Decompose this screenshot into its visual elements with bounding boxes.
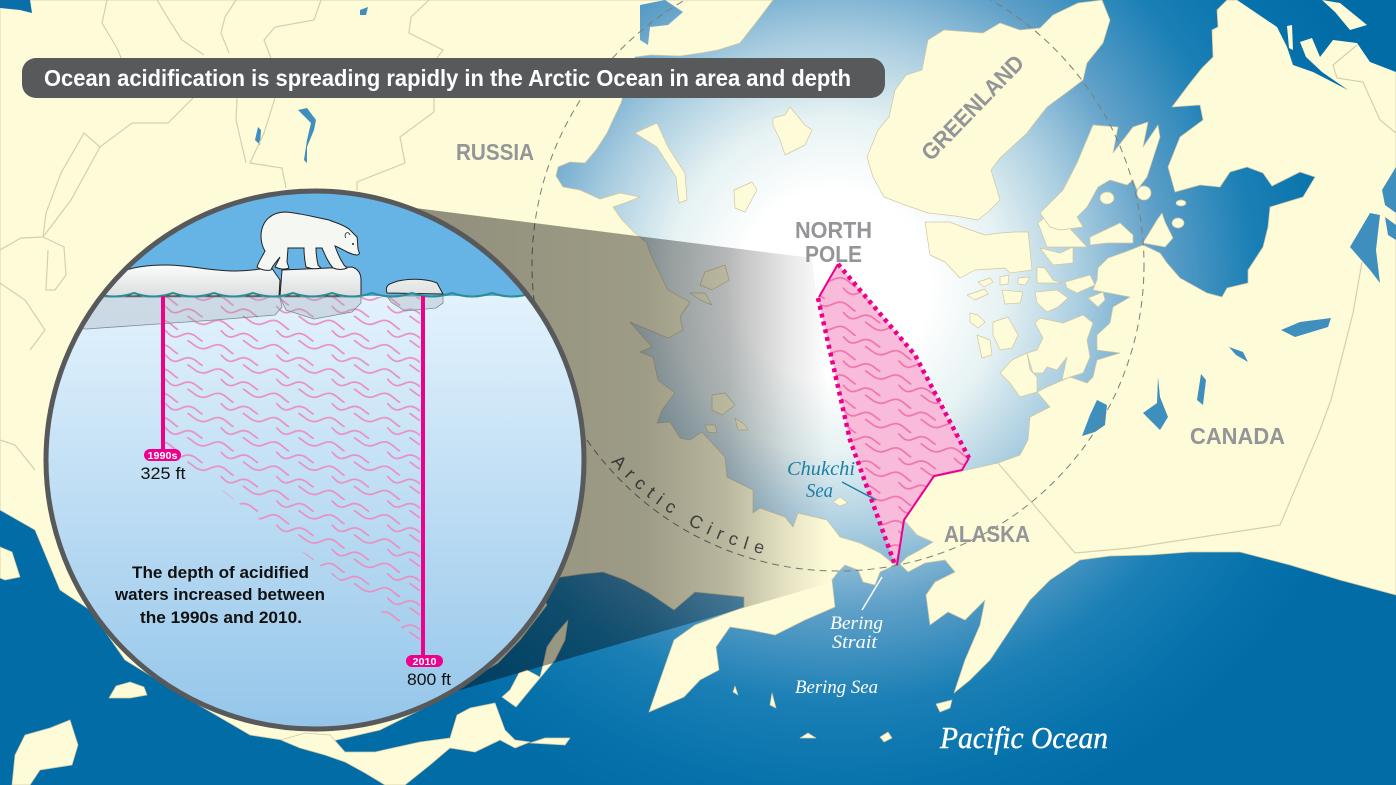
land: Arctic islands [635,107,848,506]
water: Russian north gulf [640,0,683,45]
acidified area on map [818,264,969,565]
Arctic Circle label: Arctic Circle [611,457,764,554]
acidified water wave pattern [165,297,420,642]
depth caption: waters increased between [114,585,325,604]
water surface line [94,293,532,296]
depth label 800 ft: 800 ft [407,670,451,689]
area solid edges [819,264,969,565]
land: Korea and islands [0,547,147,785]
ice floes below water [76,296,443,329]
shadow cone from map to magnifier [415,208,850,693]
land: Canadian archipelago small islands [967,275,1030,358]
depth line 1990s [161,296,165,451]
land: Greenland [867,0,1110,220]
land: Victoria island [1027,315,1093,380]
label: Bering Strait with leader: Bering [830,613,883,634]
label: Canada: CANADA [1190,423,1285,449]
sky [130,194,524,296]
label: Chukchi Sea with leader [787,458,876,502]
area dotted edges [818,264,969,565]
title banner: Ocean acidification is spreading rapidly in the Arctic Ocean in area and depth [44,65,851,91]
land: Baffin Island [1040,122,1160,230]
area wave pattern [818,264,969,565]
label: Alaska: ALASKA [944,521,1030,547]
area fill [818,264,969,565]
map: lakes [0,0,1396,436]
land: Canadian archipelago north [925,222,1032,278]
land: Japan [281,703,530,785]
depth caption [114,563,325,627]
label: North Pole: NORTH [795,217,872,243]
water: northeast Canada seas [1237,0,1396,90]
magnifier circle panel [40,185,590,736]
land: Sakhalin [502,620,568,707]
land: Alaska and Canada [900,0,1396,693]
depth line 2010 [421,296,425,656]
sea water [40,296,590,736]
depth caption: The depth of acidified [132,563,309,582]
label: Pacific Ocean: Pacific Ocean [939,720,1108,755]
map: inland and bay waters [640,0,1396,90]
land: small northeast islands [1287,0,1367,50]
magnifier ring [46,191,584,729]
label: Chukchi Sea with leader: Chukchi [787,458,855,480]
title banner [22,58,885,98]
polar bear [257,212,359,270]
land: Eurasia [0,0,895,745]
label: Chukchi Sea with leader: Sea [806,480,833,502]
land: Hudson Bay islands [1100,186,1186,247]
label: Bering Sea: Bering Sea [795,677,878,698]
label: North Pole: POLE [805,241,862,267]
land: Canadian archipelago south [1000,353,1037,397]
badge 2010: 2010 [412,656,437,668]
map: political borders [0,0,1396,553]
badge 2010 [406,655,443,668]
label: North Pole [795,217,872,267]
land: middle islands [1035,213,1133,312]
ice floes above water [75,265,443,296]
badge 1990s: 1990s [148,450,178,462]
magnifier contents [40,185,590,736]
label: Greenland: GREENLAND [916,50,1029,165]
label: Bering Strait with leader: Strait [832,632,878,653]
depth caption: the 1990s and 2010. [140,608,302,627]
depth label 325 ft: 325 ft [140,464,186,483]
land: Aleutian islands [530,686,952,745]
Arctic Circle dashed line [532,0,1144,571]
label: Bering Strait with leader [830,577,883,653]
label: Russia: RUSSIA [456,139,534,165]
